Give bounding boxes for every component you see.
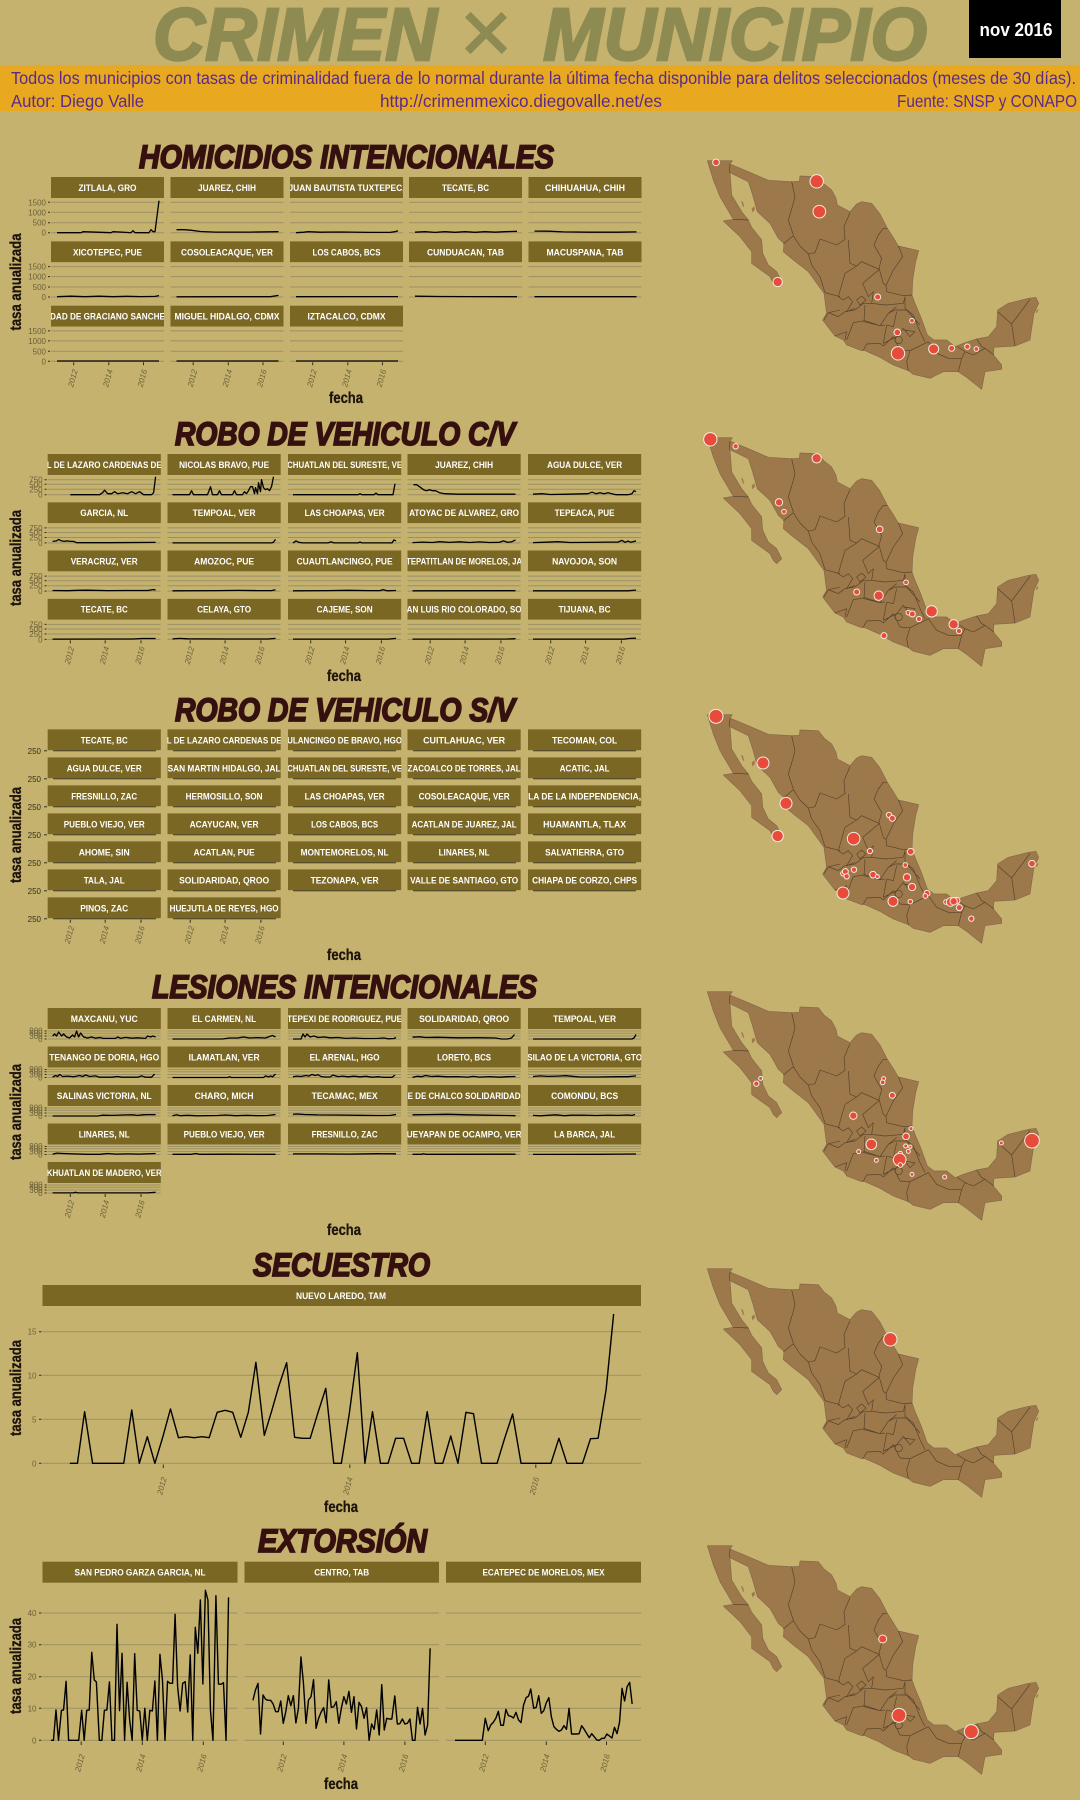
facet row 2: ACATIC, JAL xyxy=(560,763,610,773)
facet row 1 column 1: 750 xyxy=(29,476,43,485)
facet row 2 xyxy=(28,757,641,784)
facet: Salinas Victoria: 300 xyxy=(29,1109,43,1118)
facet: Tenango de Doria: 0 xyxy=(38,1074,43,1082)
facet: Iztacalco: 2016 xyxy=(375,368,388,389)
facet: Maxcanu xyxy=(29,1008,161,1044)
facet row 2 column 1 xyxy=(29,502,161,548)
facet: Tenango de Doria: 900 xyxy=(29,1065,43,1074)
facet: Tuxtepec xyxy=(288,177,404,233)
facet row 3 column 1 xyxy=(29,550,161,596)
y axis title: tasa anualizada xyxy=(8,510,25,606)
line chart: Nuevo Laredo xyxy=(28,1314,641,1497)
facet row 1 column 5 xyxy=(528,454,641,495)
y axis: 0 xyxy=(32,1736,37,1745)
facet: Zitlala: 500 xyxy=(33,219,47,228)
facet: Tecate: TECATE, BC xyxy=(442,183,489,193)
facet row 7: 2012 xyxy=(183,925,196,946)
facet row 4 column 3: CAJEME, SON xyxy=(317,605,373,615)
subtitle band: Autor: Diego Valle xyxy=(11,91,144,111)
x axis title: fecha xyxy=(327,1222,361,1239)
facet row 4 column 5: 2014 xyxy=(578,645,592,666)
facet: Linares: 900 xyxy=(29,1142,43,1151)
facet row 1: CUITLAHUAC, VER xyxy=(423,735,505,745)
line chart: Nuevo Laredo: 2012 xyxy=(155,1476,169,1497)
facet row 4 column 3: 2016 xyxy=(374,645,387,666)
facet row 3: HERMOSILLO, SON xyxy=(186,791,263,801)
facet row 3 column 1: 0 xyxy=(38,587,43,596)
facet row 1 column 5: AGUA DULCE, VER xyxy=(547,460,622,470)
facet row 4: ACAYUCAN, VER xyxy=(190,819,259,829)
y axis title: tasa anualizada xyxy=(8,1340,25,1436)
heading: EXTORSIÓN xyxy=(258,1523,428,1559)
facet row 4: HUAMANTLA, TLAX xyxy=(543,819,627,829)
facet: La Barca: LA BARCA, JAL xyxy=(554,1130,615,1140)
date badge xyxy=(969,0,1061,58)
facet: Ixhuatlan de Madero: 0 xyxy=(38,1189,43,1198)
facet row 7: PINOS, ZAC xyxy=(80,903,129,913)
facet: Loreto: LORETO, BCS xyxy=(437,1052,491,1062)
facet row 4 column 3 xyxy=(288,599,401,666)
facet: Pueblo Viejo xyxy=(168,1124,281,1154)
line chart: Nuevo Laredo: 0 xyxy=(32,1459,37,1468)
facet row 7: 2014 xyxy=(98,925,111,946)
facet: Macuspana: MACUSPANA, TAB xyxy=(546,247,624,257)
facet row 4: LOS CABOS, BCS xyxy=(311,819,378,829)
facet: Pueblo Viejo: PUEBLO VIEJO, VER xyxy=(184,1130,265,1140)
facet row 1 column 4 xyxy=(408,454,521,495)
facet: San Pedro Garza Garcia: SAN PEDRO GARZA GARCIA, NL xyxy=(74,1568,206,1578)
facet: San Pedro Garza Garcia: 2014 xyxy=(134,1753,148,1774)
facet: Iztacalco: IZTACALCO, CDMX xyxy=(308,312,386,322)
heading: ROBO DE VEHICULO C/V xyxy=(175,416,517,452)
facet: Comondu: COMONDU, BCS xyxy=(551,1091,618,1101)
facet: Xicotepec: 0 xyxy=(42,293,47,302)
facet: Loreto xyxy=(408,1046,521,1078)
facet: Ixhuatlan de Madero: 900 xyxy=(29,1180,43,1190)
facet row 5: SALVATIERRA, GTO xyxy=(545,847,624,857)
facet: Hueyapan de Ocampo xyxy=(407,1124,522,1154)
facet row 3 xyxy=(28,785,641,812)
facet: Salinas Victoria: 0 xyxy=(38,1112,43,1121)
subtitle band xyxy=(0,65,1080,111)
facet row 4 column 2: 2012 xyxy=(183,645,196,666)
facet row 4 column 3: 2012 xyxy=(303,645,317,666)
facet row 3: LAS CHOAPAS, VER xyxy=(305,791,385,801)
facet: Tempoal: TEMPOAL, VER xyxy=(553,1014,616,1024)
facet: Zitlala: 1000 xyxy=(28,208,47,217)
facet: Zitlala: ZITLALA, GRO xyxy=(78,183,136,193)
facet row 4 xyxy=(28,813,641,840)
y axis: 30 xyxy=(28,1641,37,1650)
facet row 3 column 4 xyxy=(406,550,522,591)
facet row 4 column 5: 2012 xyxy=(543,645,557,666)
facet: Cunduacan xyxy=(409,241,522,297)
facet: Centro xyxy=(244,1562,439,1774)
facet row 1: TECOMAN, COL xyxy=(552,735,617,745)
facet row 5: ACATLAN, PUE xyxy=(194,847,255,857)
facet row 2 column 5: TEPEACA, PUE xyxy=(555,508,615,518)
facet: Ixhuatlan de Madero: 600 xyxy=(29,1183,43,1192)
facet: Ixhuatlan de Madero xyxy=(29,1162,162,1220)
facet: El Arenal xyxy=(288,1046,401,1078)
facet row 4 column 1: 2014 xyxy=(98,645,111,666)
facet row 4 column 5 xyxy=(528,599,641,666)
facet: Ecatepec de Morelos: 2012 xyxy=(477,1753,491,1774)
facet: Linares xyxy=(29,1124,161,1160)
facet row 2 column 1: 750 xyxy=(29,524,43,533)
y axis title: tasa anualizada xyxy=(8,1064,25,1160)
heading: LESIONES INTENCIONALES xyxy=(152,969,538,1005)
facet: Cunduacan: CUNDUACAN, TAB xyxy=(427,247,504,257)
facet: Ixhuatlan de Madero: 2016 xyxy=(133,1199,147,1220)
facet row 2 column 2 xyxy=(168,502,281,543)
facet: Linares: LINARES, NL xyxy=(79,1130,130,1140)
facet row 3 column 1: 250 xyxy=(29,582,43,591)
facet: Dolores Hidalgo / Graciano Sanchez: 500 xyxy=(33,347,47,356)
facet: Ecatepec de Morelos: ECATEPEC DE MORELOS, MEX xyxy=(482,1568,605,1578)
map: secuestro xyxy=(707,1269,1039,1497)
y axis: 20 xyxy=(28,1673,37,1682)
facet row 7: 2014 xyxy=(218,925,231,946)
facet row 7: 2016 xyxy=(133,925,147,946)
facet row 3 column 5: NAVOJOA, SON xyxy=(552,556,617,566)
facet: Maxcanu: 0 xyxy=(38,1035,43,1044)
x axis title: fecha xyxy=(327,668,361,685)
facet row 2 column 1: 500 xyxy=(29,529,43,538)
facet: Xicotepec: 500 xyxy=(33,283,47,292)
facet: Cosoleacaque xyxy=(170,241,284,297)
facet: Maxcanu: 300 xyxy=(29,1032,43,1041)
facet row 7: 2012 xyxy=(63,925,76,946)
facet: Tecate xyxy=(409,177,522,233)
facet row 4 column 4: 2014 xyxy=(458,645,471,666)
facet row 2 column 1: GARCIA, NL xyxy=(80,508,129,518)
x axis title: fecha xyxy=(324,1499,358,1516)
facet: San Pedro Garza Garcia: 2012 xyxy=(73,1753,87,1774)
facet row 3 column 1: 500 xyxy=(29,577,43,586)
facet: Ecatepec de Morelos xyxy=(446,1562,641,1774)
facet: Tenango de Doria: 300 xyxy=(29,1070,43,1080)
facet: Charo xyxy=(168,1085,281,1116)
panel: lesiones intencionales xyxy=(8,969,642,1239)
facet: Tenango de Doria xyxy=(29,1046,161,1082)
facet: San Pedro Garza Garcia: 2016 xyxy=(195,1753,209,1774)
facet row 2 column 1: 0 xyxy=(38,539,43,548)
facet: Salinas Victoria: 600 xyxy=(29,1106,43,1115)
heading: ROBO DE VEHICULO S/V xyxy=(175,692,517,728)
facet row 4 column 5: TIJUANA, BC xyxy=(559,605,611,615)
facet: Salinas Victoria: SALINAS VICTORIA, NL xyxy=(57,1091,152,1101)
facet: Tempoal xyxy=(528,1008,641,1039)
facet: Centro: CENTRO, TAB xyxy=(314,1568,370,1578)
map: robo sin violencia xyxy=(707,709,1039,943)
facet row 1 column 1 xyxy=(29,454,162,500)
y axis title: tasa anualizada xyxy=(8,787,25,883)
facet row 6: TEZONAPA, VER xyxy=(311,875,379,885)
facet: Maxcanu: MAXCANU, YUC xyxy=(71,1014,138,1024)
strip: Nuevo Laredo: NUEVO LAREDO, TAM xyxy=(296,1291,386,1301)
facet row 2: 250 xyxy=(28,775,42,784)
facet: Xicotepec xyxy=(28,241,164,302)
facet row 7: 2016 xyxy=(253,925,267,946)
facet: Dolores Hidalgo / Graciano Sanchez: 2012 xyxy=(66,368,80,389)
facet row 6: 250 xyxy=(28,887,42,896)
line chart: Nuevo Laredo: 2014 xyxy=(341,1476,355,1497)
facet: Zitlala xyxy=(28,177,164,238)
facet row 4 column 2: 2014 xyxy=(218,645,231,666)
facet row 2 column 1: 250 xyxy=(29,534,43,543)
facet: Los Cabos xyxy=(290,241,403,297)
facet row 4 column 4 xyxy=(407,599,522,666)
facet row 6 xyxy=(28,869,641,896)
facet: Solidaridad: SOLIDARIDAD, QROO xyxy=(419,1014,509,1024)
facet: Xicotepec: 1000 xyxy=(28,273,47,282)
facet row 4 column 2 xyxy=(168,599,281,666)
facet row 3 column 3 xyxy=(288,550,401,591)
facet: Ecatepec de Morelos: 2014 xyxy=(538,1753,552,1774)
facet row 1 column 3 xyxy=(287,454,402,495)
facet: Miguel Hidalgo: 2016 xyxy=(255,368,269,389)
facet: Dolores Hidalgo / Graciano Sanchez: 2014 xyxy=(101,368,115,389)
facet: Charo: CHARO, MICH xyxy=(195,1091,254,1101)
facet: Dolores Hidalgo / Graciano Sanchez: 0 xyxy=(42,357,47,366)
facet: Maxcanu: 900 xyxy=(29,1026,43,1036)
facet row 4 column 2: CELAYA, GTO xyxy=(197,605,251,615)
facet: Tenango de Doria: 600 xyxy=(29,1068,43,1076)
panel: robo de vehiculo c/v xyxy=(8,416,641,685)
facet: Tecamac: TECAMAC, MEX xyxy=(312,1091,378,1101)
facet: Miguel Hidalgo: 2012 xyxy=(186,368,199,389)
facet: Zitlala: 0 xyxy=(42,229,47,238)
facet: Chalco Solidaridad xyxy=(408,1085,521,1116)
facet row 4 column 1: 2012 xyxy=(63,645,76,666)
facet row 4 column 4: 2012 xyxy=(423,645,436,666)
map: robo con violencia xyxy=(704,433,1039,666)
facet: Linares: 300 xyxy=(29,1148,43,1156)
facet row 4 column 3: 2014 xyxy=(338,645,352,666)
facet row 1 column 4: JUAREZ, CHIH xyxy=(435,460,493,470)
facet row 2 column 4 xyxy=(408,502,521,543)
facet: Salinas Victoria xyxy=(29,1085,161,1121)
facet: Comondu xyxy=(528,1085,641,1116)
y axis: 10 xyxy=(28,1704,37,1713)
facet: Centro: 2012 xyxy=(275,1753,289,1774)
facet: Linares: 600 xyxy=(29,1144,43,1154)
facet row 1 xyxy=(28,729,641,756)
facet row 5: LINARES, NL xyxy=(439,847,490,857)
facet: El Carmen xyxy=(168,1008,281,1039)
subtitle band: http://crimenmexico.diegovalle.net/es xyxy=(380,91,662,111)
facet: Centro: 2016 xyxy=(397,1753,410,1774)
facet row 4: PUEBLO VIEJO, VER xyxy=(64,819,145,829)
facet row 1: 250 xyxy=(28,747,42,756)
facet: Chihuahua xyxy=(528,177,642,233)
facet row 1 column 1: 0 xyxy=(38,491,43,500)
facet row 4 column 1: 750 xyxy=(29,620,43,629)
facet: Juarez: JUAREZ, CHIH xyxy=(198,183,256,193)
facet: San Pedro Garza Garcia xyxy=(42,1562,238,1774)
facet row 4 column 1: 2016 xyxy=(133,645,147,666)
facet row 2: AGUA DULCE, VER xyxy=(67,763,142,773)
facet row 3: 250 xyxy=(28,803,42,812)
line chart: Nuevo Laredo: 10 xyxy=(28,1371,37,1380)
facet: Iztacalco xyxy=(290,306,403,389)
facet row 2 column 3: LAS CHOAPAS, VER xyxy=(305,508,385,518)
facet: Zitlala: 1500 xyxy=(28,198,47,207)
facet row 4 column 1 xyxy=(29,599,161,666)
facet: Centro: 2014 xyxy=(336,1753,349,1774)
facet row 4: 250 xyxy=(28,831,42,840)
facet row 3 column 3: CUAUTLANCINGO, PUE xyxy=(297,556,393,566)
facet row 4 column 1: 500 xyxy=(29,625,43,634)
facet: Dolores Hidalgo / Graciano Sanchez xyxy=(28,306,165,389)
facet row 5 xyxy=(28,841,641,868)
facet row 1 column 2: NICOLAS BRAVO, PUE xyxy=(179,460,269,470)
facet: Chihuahua: CHIHUAHUA, CHIH xyxy=(545,183,625,193)
title xyxy=(153,0,927,83)
facet: Tepexi de Rodriguez xyxy=(287,1008,402,1039)
facet: Los Cabos: LOS CABOS, BCS xyxy=(312,247,380,257)
facet: Xicotepec: 1500 xyxy=(28,263,47,272)
line chart: Nuevo Laredo: 15 xyxy=(28,1328,37,1337)
facet: Fresnillo: FRESNILLO, ZAC xyxy=(312,1130,378,1140)
facet row 6: TALA, JAL xyxy=(84,875,125,885)
facet row 2 column 5 xyxy=(528,502,641,543)
facet: Miguel Hidalgo: 2014 xyxy=(221,368,234,389)
date badge: nov 2016 xyxy=(980,20,1052,40)
facet row 6: SOLIDARIDAD, QROO xyxy=(179,875,269,885)
facet row 3 column 1: VERACRUZ, VER xyxy=(71,556,138,566)
y axis: 40 xyxy=(28,1609,37,1618)
facet: Miguel Hidalgo xyxy=(170,306,284,389)
panel: homicidios intencionales xyxy=(8,139,642,407)
facet: Dolores Hidalgo / Graciano Sanchez: 1000 xyxy=(28,337,47,346)
facet: Salinas Victoria: 900 xyxy=(29,1104,43,1112)
map: extorsion xyxy=(707,1546,1039,1774)
x axis title: fecha xyxy=(324,1776,358,1793)
y axis title: tasa anualizada xyxy=(8,233,25,330)
facet: Ixhuatlan de Madero: 2014 xyxy=(98,1199,111,1220)
facet row 7 xyxy=(28,897,281,946)
heading: HOMICIDIOS INTENCIONALES xyxy=(139,139,555,175)
facet: Ixhuatlan de Madero: 300 xyxy=(29,1186,43,1195)
map: lesiones xyxy=(707,992,1039,1220)
panel: secuestro xyxy=(8,1247,641,1516)
facet row 4 column 1: TECATE, BC xyxy=(81,605,128,615)
facet row 2 column 2: TEMPOAL, VER xyxy=(193,508,256,518)
facet: El Carmen: EL CARMEN, NL xyxy=(192,1014,256,1024)
line chart: Nuevo Laredo: 2016 xyxy=(528,1476,541,1497)
facet row 1: TECATE, BC xyxy=(81,735,128,745)
facet row 5: MONTEMORELOS, NL xyxy=(301,847,389,857)
strip: Nuevo Laredo xyxy=(42,1285,641,1306)
facet row 2 column 3 xyxy=(288,502,401,543)
y axis title: tasa anualizada xyxy=(8,1618,25,1714)
facet: Juarez xyxy=(170,177,284,233)
facet: El Arenal: EL ARENAL, HGO xyxy=(310,1052,380,1062)
x axis title: fecha xyxy=(327,947,361,964)
facet row 3 column 2 xyxy=(168,550,281,591)
facet row 4 column 5: 2016 xyxy=(614,645,627,666)
facet row 4 column 1: 0 xyxy=(38,635,43,644)
y axis xyxy=(28,1609,42,1745)
facet row 3 column 5 xyxy=(528,550,641,591)
facet: Macuspana xyxy=(528,241,642,297)
facet row 7: 250 xyxy=(28,915,42,924)
facet: Ilamatlan: ILAMATLAN, VER xyxy=(189,1052,260,1062)
facet row 1 column 2 xyxy=(168,454,281,495)
facet: Tecamac xyxy=(288,1085,401,1116)
facet row 5: 250 xyxy=(28,859,42,868)
facet row 3 column 1: 750 xyxy=(29,572,43,581)
facet: Cosoleacaque: COSOLEACAQUE, VER xyxy=(181,247,273,257)
heading: SECUESTRO xyxy=(253,1247,430,1283)
facet row 4 column 4: 2016 xyxy=(493,645,507,666)
facet: Iztacalco: 2012 xyxy=(305,368,319,389)
facet row 1 column 1: 250 xyxy=(29,485,43,494)
facet row 1 column 1: 500 xyxy=(29,480,43,489)
facet: Xicotepec: XICOTEPEC, PUE xyxy=(73,247,142,257)
facet: La Barca xyxy=(528,1124,641,1154)
facet: Ixhuatlan de Madero: 2012 xyxy=(63,1199,76,1220)
facet: Solidaridad xyxy=(408,1008,521,1039)
facet row 3: COSOLEACAQUE, VER xyxy=(419,791,510,801)
map: homicidios xyxy=(707,159,1039,389)
facet row 3 column 2: AMOZOC, PUE xyxy=(194,556,254,566)
facet: Maxcanu: 600 xyxy=(29,1029,43,1038)
facet row 3: FRESNILLO, ZAC xyxy=(71,791,138,801)
facet: Ilamatlan xyxy=(168,1046,281,1078)
facet row 4 column 2: 2016 xyxy=(253,645,267,666)
facet row 5: AHOME, SIN xyxy=(79,847,130,857)
facet: Dolores Hidalgo / Graciano Sanchez: 1500 xyxy=(28,327,47,336)
panel: extorsion xyxy=(8,1523,641,1793)
facet: Linares: 0 xyxy=(38,1150,43,1160)
x axis title: fecha xyxy=(329,390,363,407)
facet: Dolores Hidalgo / Graciano Sanchez: 2016 xyxy=(136,368,149,389)
line chart: Nuevo Laredo: 5 xyxy=(32,1415,37,1424)
facet: Fresnillo xyxy=(288,1124,401,1154)
facet row 4 column 1: 250 xyxy=(29,630,43,639)
facet: Silao xyxy=(527,1046,642,1078)
panel: robo de vehiculo s/v xyxy=(8,692,641,964)
facet: Iztacalco: 2014 xyxy=(340,368,354,389)
facet: Ecatepec de Morelos: 2016 xyxy=(598,1753,612,1774)
